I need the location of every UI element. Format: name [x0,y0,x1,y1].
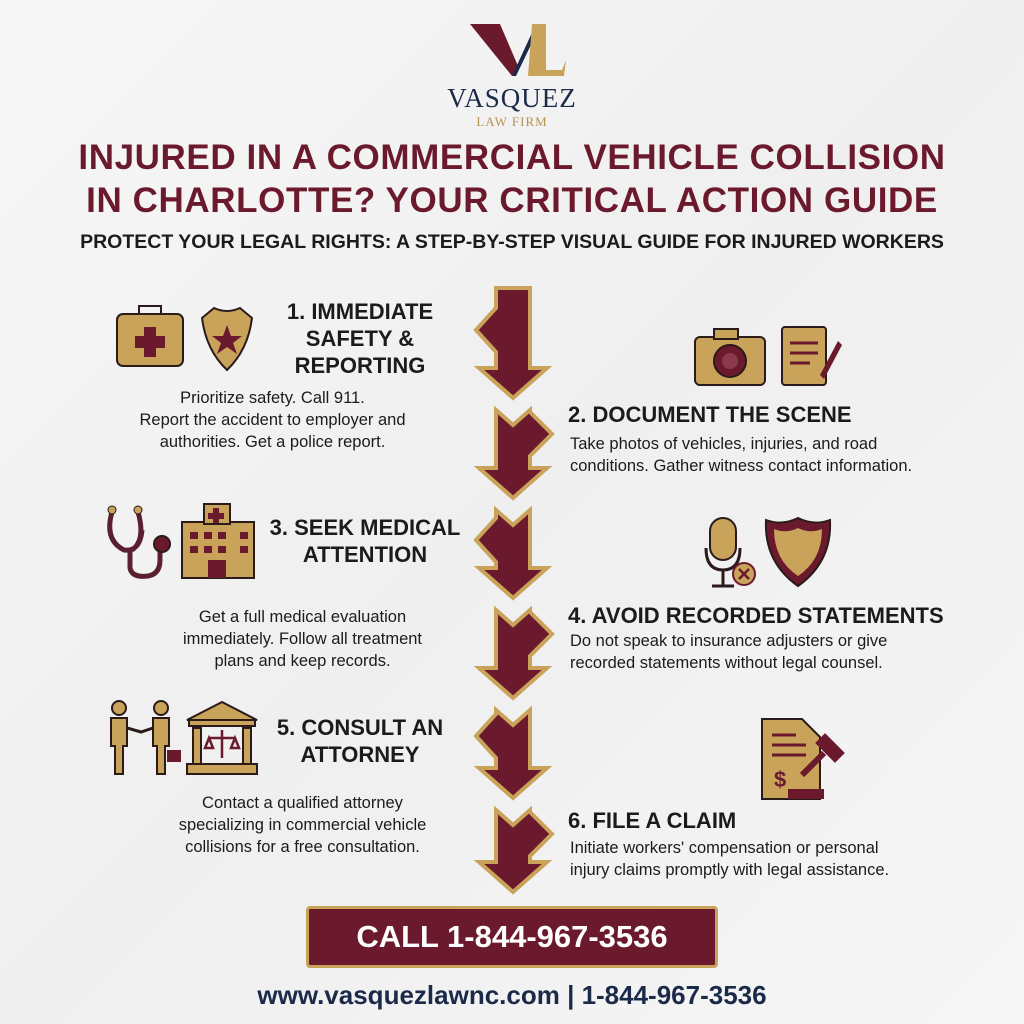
step 5 text: Contact a qualified attorney [202,794,403,812]
step 4 text: Do not speak to insurance adjusters or give [570,632,887,650]
step 5 heading [277,715,443,767]
title: IN CHARLOTTE? YOUR CRITICAL ACTION GUIDE [86,181,938,220]
call button [306,906,718,968]
step 4 text [570,632,887,672]
title: INJURED IN A COMMERCIAL VEHICLE COLLISION [78,138,946,177]
step 3 heading [270,515,460,567]
arrow chain [473,286,555,894]
step 2 text: Take photos of vehicles, injuries, and road [570,435,877,453]
step 3 text [183,608,422,670]
step 1 text [140,389,406,451]
step 6 heading: 6. FILE A CLAIM [568,808,736,833]
step 5 heading: ATTORNEY [300,742,419,767]
step 3 heading: ATTENTION [303,542,427,567]
step 2 text [570,435,912,475]
call button: CALL 1-844-967-3536 [356,919,668,954]
subtitle: PROTECT YOUR LEGAL RIGHTS: A STEP-BY-STEP VISUAL GUIDE FOR INJURED WORKERS [80,231,944,253]
step 6 icon [761,718,845,800]
step 2 icons [694,326,842,386]
step 1 text: authorities. Get a police report. [160,433,385,451]
step 3 icons [107,503,255,579]
step 5 text: specializing in commercial vehicle [179,816,426,834]
step 3 text: immediately. Follow all treatment [183,630,422,648]
step 3 text: plans and keep records. [214,652,391,670]
step 6 text: Initiate workers' compensation or personal [570,839,879,857]
logo: LAW FIRM [476,114,548,129]
step 3 text: Get a full medical evaluation [199,608,406,626]
step 5 text: collisions for a free consultation. [185,838,420,856]
step 1 text: Report the accident to employer and [140,411,406,429]
step 6 icon: $ [774,767,786,792]
logo: VASQUEZ [447,83,577,113]
step 1 icons [116,305,254,372]
step 1 text: Prioritize safety. Call 911. [180,389,365,407]
step 2 heading: 2. DOCUMENT THE SCENE [568,402,852,427]
step 6 text: injury claims promptly with legal assistance. [570,861,889,879]
footer: www.vasquezlawnc.com | 1-844-967-3536 [257,980,767,1010]
step 1 heading: REPORTING [295,353,425,378]
step 6 text [570,839,889,879]
step 5 icons [110,700,258,775]
title [78,138,946,220]
step 4 heading: 4. AVOID RECORDED STATEMENTS [568,603,944,628]
step 1 heading [287,299,433,378]
step 5 text [179,794,426,856]
step 4 icons [704,516,832,588]
step 2 text: conditions. Gather witness contact information. [570,457,912,475]
logo [447,24,577,129]
step 3 heading: 3. SEEK MEDICAL [270,515,460,540]
step 4 text: recorded statements without legal counsel. [570,654,883,672]
step 1 heading: 1. IMMEDIATE [287,299,433,324]
step 1 heading: SAFETY & [306,326,414,351]
step 5 heading: 5. CONSULT AN [277,715,443,740]
